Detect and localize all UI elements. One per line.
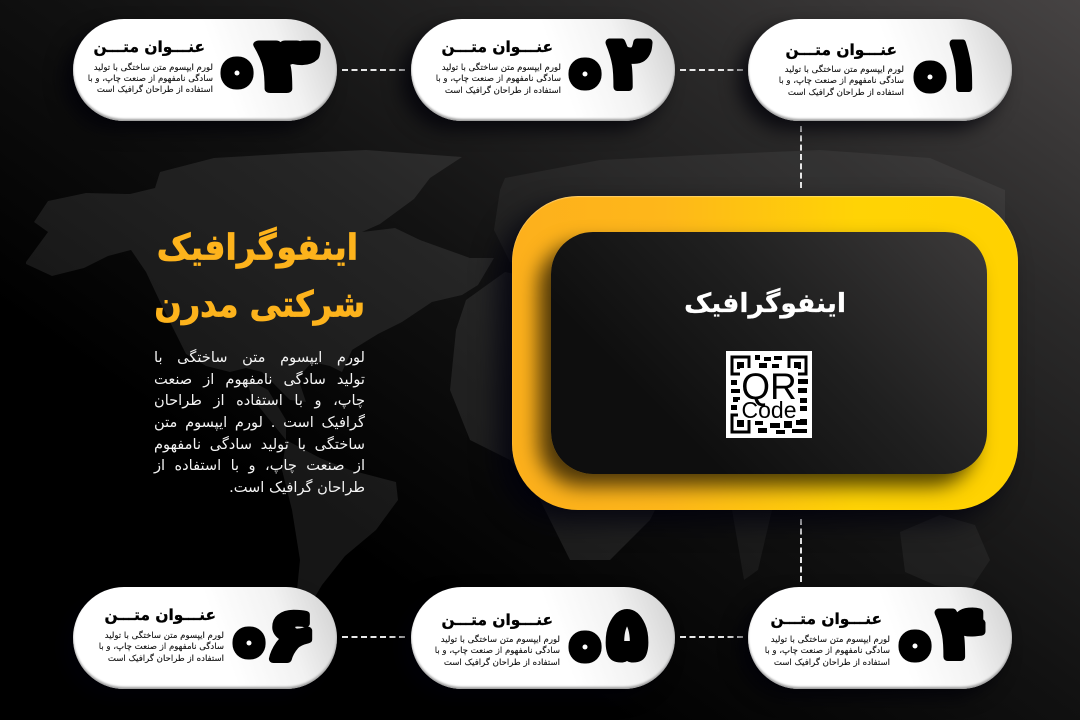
body 01: سادگی نامفهوم از صنعت چاپ، و با [779, 76, 904, 86]
body 06: استفاده از طراحان گرافیک است [108, 654, 224, 664]
body 03 [88, 62, 213, 95]
connector: 3 to 2 [342, 69, 405, 71]
numeral 04 [898, 593, 986, 674]
connector: 5 to 4 [680, 636, 743, 638]
body 04: استفاده از طراحان گرافیک است [774, 658, 890, 668]
body 06: سادگی نامفهوم از صنعت چاپ، و با [99, 642, 224, 652]
numeral 05 [568, 593, 648, 675]
centre card: yellow frame [512, 196, 1018, 510]
QR label: Code [742, 397, 796, 423]
body 02 [436, 62, 561, 96]
numeral 05: ۰ [581, 639, 589, 653]
numeral 03 [220, 24, 321, 106]
paragraph: left column: از صنعت چاپ، و با استفاده از [154, 457, 365, 474]
heading: left column: اینفوگرافیک [157, 226, 358, 268]
pill 04 [748, 587, 1012, 689]
title 06: عنـــوان متـــن [105, 606, 216, 624]
body 01 [779, 64, 904, 98]
body 06 [99, 630, 224, 664]
connector: 1 to centre card [800, 126, 802, 188]
pill 06 [73, 587, 337, 689]
connector: 6 to 5 [342, 636, 405, 638]
body 03: لورم ایپسوم متن ساختگی با تولید [94, 62, 213, 72]
pill 05 [411, 587, 675, 689]
connector: 2 to 1 [680, 69, 743, 71]
body 01: استفاده از طراحان گرافیک است [788, 88, 904, 98]
connector: centre card to 4 [800, 519, 802, 582]
numeral 06: ۰ [245, 635, 253, 649]
title 01: عنـــوان متـــن [786, 41, 897, 59]
numeral 04: ۰ [911, 638, 919, 652]
pill 03 [73, 19, 337, 121]
body 05: سادگی نامفهوم از صنعت چاپ، و با [435, 646, 560, 656]
body 02: استفاده از طراحان گرافیک است [445, 86, 561, 96]
numeral 02 [568, 23, 653, 104]
paragraph: left column: چاپ، و با استفاده از طراحان [154, 392, 365, 409]
body 02: لورم ایپسوم متن ساختگی با تولید [442, 63, 561, 73]
body 03: سادگی نامفهوم از صنعت چاپ، و با [88, 74, 213, 84]
body 04: لورم ایپسوم متن ساختگی با تولید [771, 635, 890, 645]
paragraph: left column [153, 348, 365, 496]
numeral 01: ۰ [926, 69, 934, 83]
paragraph: left column: تولید سادگی نامفهوم از صنعت [154, 371, 365, 388]
title 03: عنـــوان متـــن [94, 38, 205, 56]
heading: left column: شرکتی مدرن [154, 283, 365, 325]
numeral 01: ۱ [945, 23, 979, 105]
numeral 02: ۰ [581, 66, 589, 80]
body 02: سادگی نامفهوم از صنعت چاپ، و با [436, 74, 561, 84]
title 02: عنـــوان متـــن [442, 38, 553, 56]
numeral 04: ۴ [938, 593, 984, 674]
numeral 06: ۶ [267, 594, 315, 676]
QR label [738, 366, 800, 423]
paragraph: left column: طراحان گرافیک است. [229, 479, 365, 496]
body 05: لورم ایپسوم متن ساختگی با تولید [441, 635, 560, 645]
paragraph: left column: ساختگی با تولید سادگی نامفهوم [154, 436, 365, 453]
body 05 [435, 634, 560, 668]
pill 01 [748, 19, 1012, 121]
body 01: لورم ایپسوم متن ساختگی با تولید [785, 65, 904, 75]
pill 02 [411, 19, 675, 121]
body 05: استفاده از طراحان گرافیک است [444, 658, 560, 668]
QR code [726, 351, 812, 438]
title 05: عنـــوان متـــن [442, 611, 553, 629]
numeral 02: ۲ [608, 23, 650, 104]
centre card: dark panel [551, 232, 987, 474]
paragraph: left column: گرافیک است . لورم ایپسوم متن [154, 414, 365, 431]
numeral 03: ۳ [258, 24, 316, 106]
title 04: عنـــوان متـــن [771, 610, 882, 628]
centre card title: اینفوگرافیک [684, 288, 846, 319]
body 04 [765, 634, 890, 668]
numeral 01 [914, 23, 979, 105]
paragraph: left column: لورم ایپسوم متن ساختگی با [154, 349, 365, 366]
body 03: استفاده از طراحان گرافیک است [97, 85, 213, 95]
numeral 05: ۵ [607, 593, 647, 675]
QR label: QR [741, 366, 797, 407]
body 04: سادگی نامفهوم از صنعت چاپ، و با [765, 646, 890, 656]
numeral 03: ۰ [233, 65, 241, 79]
body 06: لورم ایپسوم متن ساختگی با تولید [105, 631, 224, 641]
numeral 06 [232, 594, 315, 676]
heading: left column [154, 226, 365, 326]
